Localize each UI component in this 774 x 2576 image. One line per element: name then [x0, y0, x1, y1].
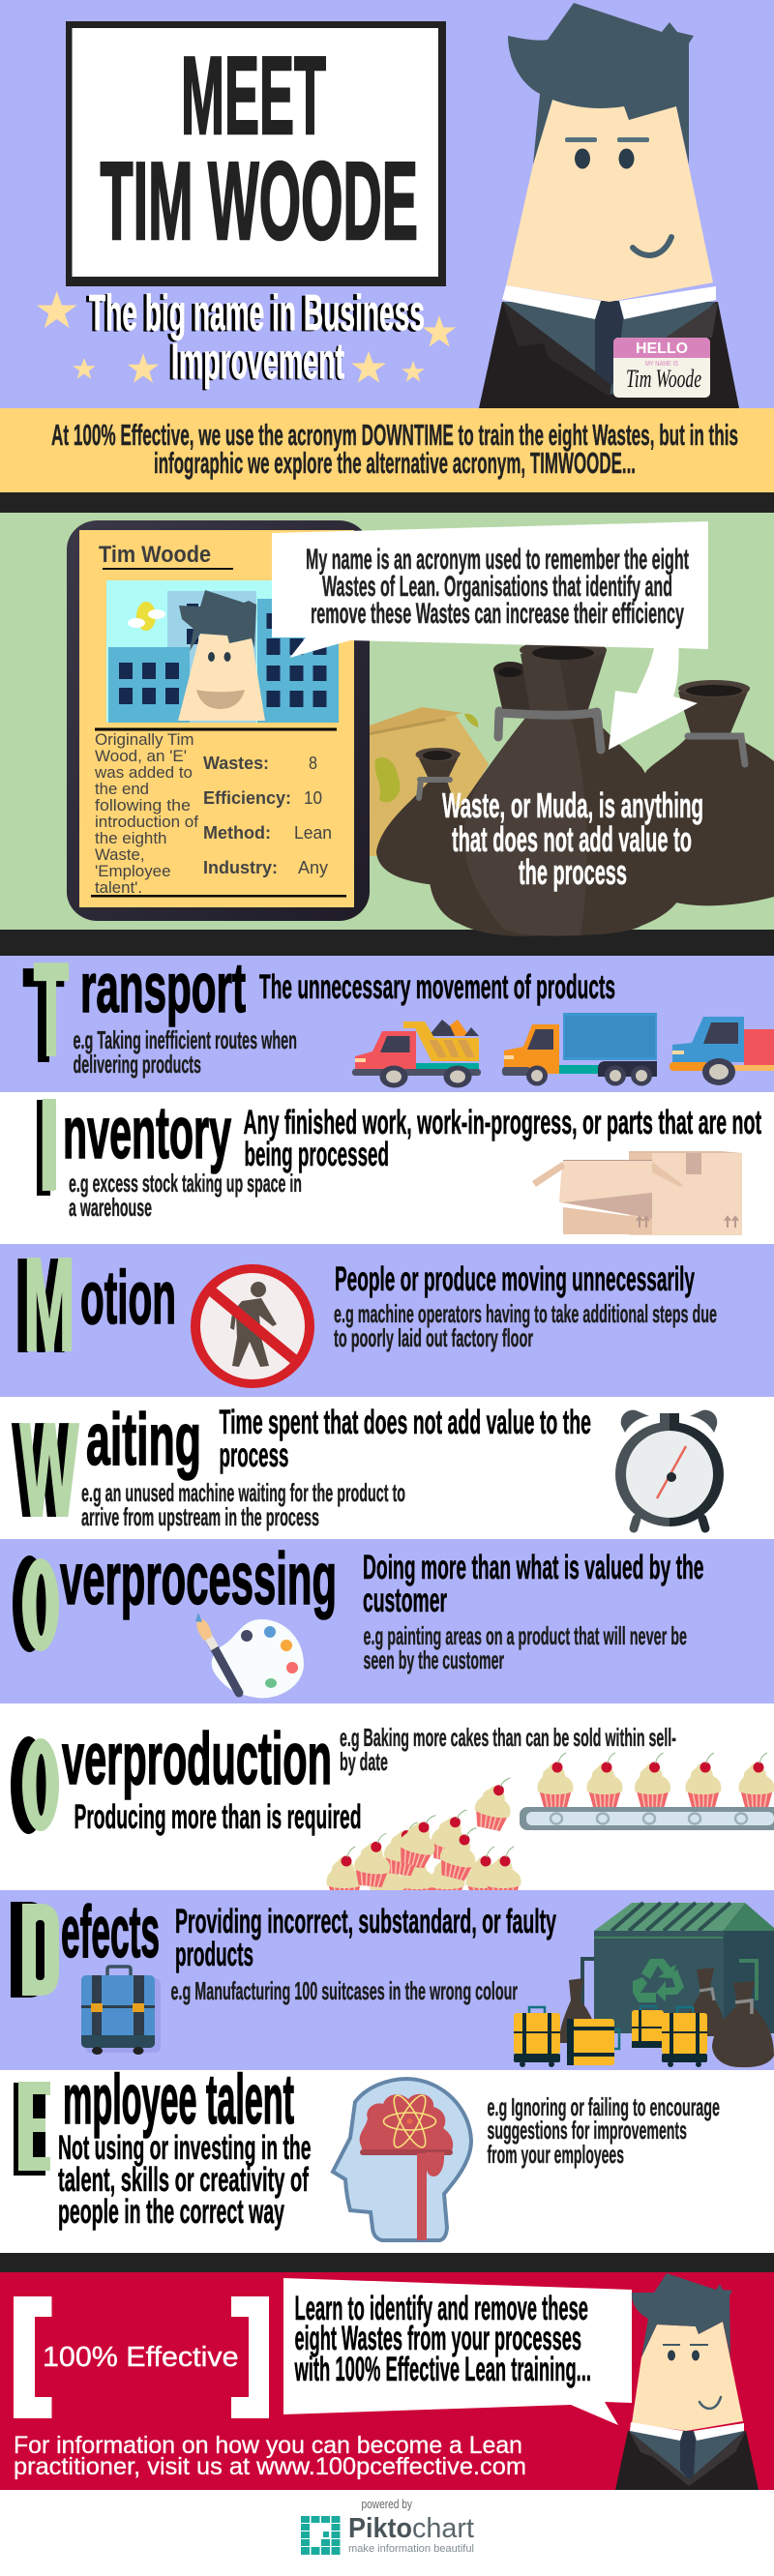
letter O — [13, 1532, 59, 1678]
card description: the end — [95, 780, 149, 798]
letter W: W — [13, 1397, 69, 1543]
subtitle: The big name in Business — [86, 286, 421, 342]
letter D — [11, 1877, 59, 2023]
example — [488, 2092, 720, 2169]
panel: Employee talent: E — [17, 2051, 46, 2197]
name badge — [613, 338, 710, 398]
definition: process — [219, 1436, 288, 1474]
example: from your employees — [488, 2140, 624, 2169]
card description: Wood, an 'E' — [95, 747, 187, 765]
letter I — [37, 1075, 58, 1216]
definition — [244, 1104, 761, 1173]
card name: Tim Woode — [99, 542, 211, 568]
card stats: Any — [298, 858, 328, 877]
panel: header — [0, 0, 774, 408]
logo: Piktochart wordmark — [348, 2513, 474, 2555]
card stats: Industry: — [203, 858, 278, 877]
example — [74, 1025, 297, 1079]
heading: verprocessing — [60, 1538, 337, 1620]
example: to poorly laid out factory floor — [334, 1323, 533, 1352]
heading: nventory — [63, 1092, 231, 1174]
character: Tim Woode — [479, 3, 739, 408]
panel: Defects: D — [14, 1877, 48, 2023]
definition — [219, 1404, 591, 1474]
definition: Producing more than is required — [74, 1798, 362, 1836]
panel: Employee talent: mployee talent — [63, 2061, 294, 2139]
speech bubble: training — [283, 2278, 632, 2425]
letter T — [23, 936, 69, 1088]
stars — [37, 291, 456, 383]
title box: TIM WOODE — [101, 140, 418, 263]
subtitle — [86, 285, 425, 391]
logo: Piktochart icon — [301, 2516, 341, 2555]
icon: cardboard boxes — [532, 1151, 742, 1235]
icon: container truck — [502, 1013, 657, 1085]
panel: Waiting — [0, 1397, 774, 1543]
card description: was added to — [94, 763, 193, 782]
subtitle: Improvement — [171, 334, 344, 390]
logo: Piktochart wordmark: Pikto — [348, 2513, 412, 2544]
example — [364, 1621, 687, 1674]
letter O — [11, 1713, 59, 1859]
icon: no walking sign — [191, 1264, 314, 1388]
example: e.g Taking inefficient routes when — [74, 1025, 297, 1054]
heading: ransport — [80, 950, 246, 1027]
example: delivering products — [74, 1050, 201, 1079]
website text — [14, 2432, 526, 2480]
website text: For information on how you can become a Lean — [14, 2432, 522, 2459]
example — [81, 1478, 405, 1531]
example: a warehouse — [69, 1193, 152, 1222]
card description: Originally Tim — [95, 730, 194, 749]
title box: MEET — [181, 35, 326, 158]
panel: call to action — [0, 2253, 774, 2490]
website text: practitioner, visit us at www.100pceffective.com — [14, 2453, 526, 2480]
icon: alarm clock — [615, 1410, 724, 1528]
name badge: Tim Woode — [626, 365, 701, 393]
card description: Waste, — [95, 845, 145, 864]
logo: 100% Effective brackets — [14, 2296, 269, 2418]
logo: Piktochart wordmark: chart — [412, 2513, 474, 2544]
definition — [58, 2129, 312, 2231]
definition: customer — [363, 1582, 447, 1619]
logo: 100% Effective brackets: 100% Effective — [43, 2342, 238, 2373]
example — [340, 1723, 676, 1776]
example: e.g an unused machine waiting for the product to — [81, 1478, 405, 1507]
card stats: Wastes: — [203, 754, 269, 773]
card stats: Method: — [203, 823, 271, 843]
card stats: Lean — [294, 823, 332, 843]
card stats: 10 — [304, 788, 322, 808]
card description: following the — [95, 796, 191, 814]
name badge: MY NAME IS — [645, 361, 678, 368]
card stats — [203, 754, 332, 877]
letter I: I — [39, 1075, 58, 1216]
trading card — [67, 520, 370, 921]
icon: dump truck — [352, 1020, 481, 1087]
panel: Employee talent — [0, 2051, 774, 2253]
heading: verproduction — [62, 1718, 332, 1800]
letter M — [15, 1231, 75, 1378]
heading: aiting — [86, 1399, 201, 1481]
card description: introduction of — [95, 813, 198, 831]
panel: Overprocessing — [0, 1532, 774, 1703]
subtitle: The big name in Business — [89, 285, 425, 341]
card description: 'Employee — [95, 862, 170, 880]
icon: delivery truck — [670, 1017, 774, 1085]
panel: Motion — [0, 1231, 774, 1397]
letter M: M — [15, 1232, 68, 1378]
icon: cupcake pile — [327, 1809, 521, 1890]
icon: paint palette — [195, 1613, 304, 1698]
definition: Not using or investing in the — [58, 2129, 312, 2167]
letter W — [13, 1397, 78, 1543]
card description: the eighth — [95, 829, 166, 847]
letter T: T — [23, 942, 64, 1088]
example: seen by the customer — [364, 1645, 504, 1674]
definition: talent, skills or creativity of — [58, 2161, 309, 2199]
definition: products — [175, 1936, 253, 1973]
panel: intro band — [0, 408, 774, 492]
icon: dumpster with bags and suitcases — [514, 1903, 774, 2067]
name badge: HELLO — [636, 341, 688, 357]
icon: conveyor belt with cupcakes — [520, 1753, 774, 1830]
text: waste definition — [442, 785, 703, 892]
icon: head and brain — [333, 2079, 471, 2240]
logo: Piktochart wordmark: make information beautiful — [348, 2543, 474, 2555]
icon: falling cupcake — [471, 1772, 518, 1832]
title box — [66, 21, 446, 286]
definition — [363, 1549, 704, 1619]
heading: otion — [80, 1255, 176, 1340]
panel: Motion: M — [23, 1231, 75, 1377]
card description: talent'. — [95, 878, 142, 897]
speech bubble: acronym — [272, 521, 708, 750]
panel: Waiting: W — [20, 1397, 78, 1543]
definition — [175, 1903, 556, 1973]
panel: Inventory — [0, 1075, 774, 1244]
text: waste definition: the process — [519, 852, 627, 892]
card stats: Efficiency: — [203, 788, 291, 808]
icon: blue suitcase — [81, 1967, 161, 2055]
card picture — [106, 580, 339, 723]
footer: Piktochart credit: powered by — [362, 2497, 412, 2511]
panel: Overprocessing: O — [14, 1532, 45, 1678]
example: arrive from upstream in the process — [81, 1502, 319, 1531]
subtitle: Improvement — [168, 335, 342, 391]
panel: Defects — [0, 1877, 774, 2070]
panel: Transport: T — [34, 936, 69, 1082]
example: e.g excess stock taking up space in — [69, 1169, 302, 1198]
character: small Tim Woode — [615, 2273, 759, 2490]
panel: Defects: efects — [61, 1891, 160, 1973]
definition: being processed — [244, 1136, 389, 1173]
panel: Overproduction: O — [13, 1713, 45, 1859]
example — [334, 1299, 717, 1352]
illustration: cardboard box and waste bags — [370, 640, 774, 936]
footer: Piktochart credit — [0, 2490, 774, 2576]
panel: card section background — [0, 492, 774, 956]
card stats: 8 — [309, 754, 317, 773]
panel: Transport — [0, 936, 774, 1092]
definition: people in the correct way — [58, 2193, 284, 2231]
example: by date — [340, 1747, 388, 1776]
letter E — [14, 2051, 50, 2197]
example — [69, 1169, 302, 1222]
card description — [94, 730, 198, 897]
panel: Overproduction — [11, 1728, 774, 1890]
